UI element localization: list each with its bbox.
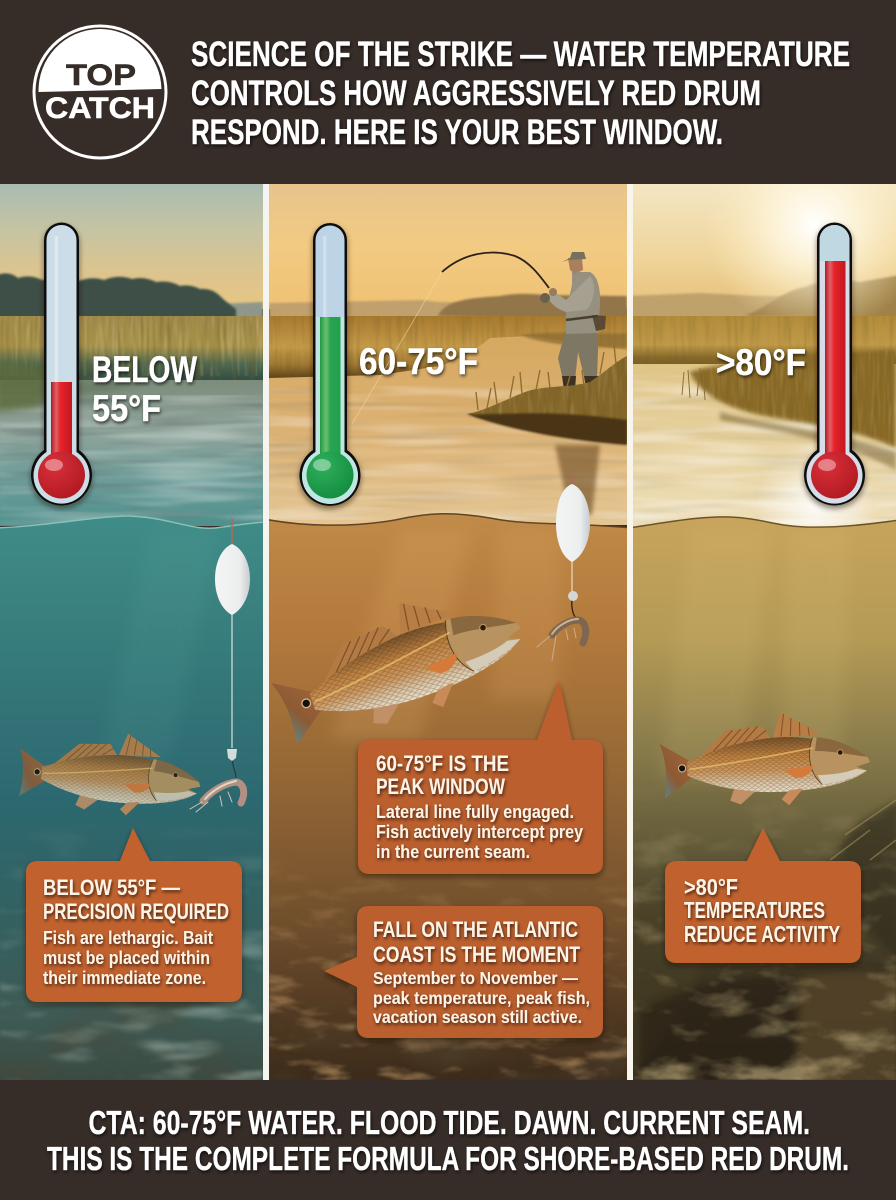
- callout: peak window: in the current seam.: [376, 842, 530, 862]
- callout: below 55F: must be placed within: [43, 948, 210, 968]
- rocky bottom: [628, 780, 896, 1085]
- label: 60-75F: 60-75°F: [359, 341, 478, 382]
- label: below 55F: 55°F: [92, 388, 161, 429]
- shrimp: [537, 619, 586, 660]
- grass island: [466, 345, 627, 445]
- logo: Top Catch badge: [32, 24, 168, 160]
- callout: peak window: [358, 680, 603, 874]
- callout: fall on the Atlantic coast: COAST IS THE MOMENT: [373, 942, 580, 967]
- thermometer: above 80F: [804, 222, 865, 505]
- angler and rod: [352, 252, 606, 424]
- underwater section: [0, 516, 270, 1085]
- callout: peak window: Fish actively intercept prey: [376, 822, 583, 842]
- fish: lethargic red drum: [19, 734, 200, 816]
- distant shoreline: [227, 300, 263, 316]
- fish: active red drum: [272, 603, 520, 744]
- thermometer: 60-75F: [299, 223, 360, 506]
- title: [191, 34, 850, 152]
- callout: below 55F: PRECISION REQUIRED: [43, 899, 229, 924]
- callout: fall on the Atlantic coast: vacation season still active.: [373, 1007, 582, 1027]
- fish: slowed red drum: [659, 710, 871, 809]
- label: below 55F: BELOW: [92, 349, 197, 390]
- water surface: [633, 364, 896, 529]
- callout: above 80F: [665, 828, 861, 963]
- callout: below 55F: BELOW 55°F —: [43, 875, 180, 900]
- water surface: [269, 336, 627, 525]
- callout: peak window: 60-75°F IS THE: [376, 751, 509, 776]
- panel: below 55F: [0, 184, 270, 1085]
- callout: fall on the Atlantic coast: FALL ON THE ATLANTIC: [373, 917, 578, 942]
- grass bank: [682, 345, 896, 470]
- callout: below 55F: Fish are lethargic. Bait: [43, 928, 213, 948]
- panel: 60-75F: [260, 184, 632, 1085]
- callout: peak window: Lateral line fully engaged.: [376, 802, 574, 822]
- callout: below 55F: their immediate zone.: [43, 968, 206, 988]
- footer bar: [0, 1080, 896, 1200]
- shrimp: [190, 781, 244, 812]
- hazy shoreline: [633, 292, 817, 316]
- bobber and line: [215, 518, 250, 778]
- callout: above 80F: TEMPERATURES: [684, 897, 825, 923]
- torso: [566, 272, 600, 334]
- logo: Top Catch badge: TOP: [66, 59, 136, 92]
- callout: peak window: PEAK WINDOW: [376, 774, 505, 799]
- legs: [558, 330, 598, 380]
- panel dividers: [263, 184, 269, 1080]
- call to action: [47, 1104, 849, 1177]
- header bar: [0, 0, 896, 184]
- label: below 55F: [92, 349, 197, 429]
- underwater section: [628, 517, 896, 1085]
- panel: above 80F: [628, 115, 896, 1085]
- label: above 80F: >80°F: [716, 342, 806, 383]
- callout: above 80F: REDUCE ACTIVITY: [684, 921, 840, 947]
- hazy shoreline: [269, 299, 627, 316]
- bobber and line: [556, 476, 590, 618]
- callout: fall on the Atlantic coast: [324, 906, 603, 1038]
- head and hat: [568, 258, 583, 274]
- callout: above 80F: >80°F: [684, 874, 738, 900]
- callout: fall on the Atlantic coast: peak temperature, peak fish,: [373, 988, 590, 1008]
- callout: fall on the Atlantic coast: September to November —: [373, 968, 578, 988]
- callout: below 55F: [26, 828, 242, 1002]
- logo: Top Catch badge: CATCH: [45, 92, 155, 125]
- underwater section: [264, 514, 632, 1085]
- tree line: [0, 273, 236, 320]
- thermometer: below 55F: [31, 223, 92, 505]
- hands and reel: [540, 293, 550, 303]
